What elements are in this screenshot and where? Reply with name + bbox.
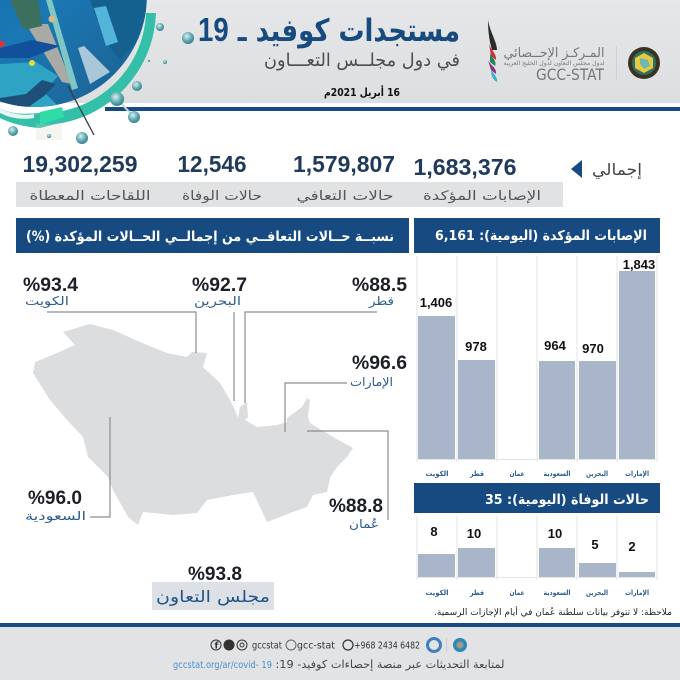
stat: recoveries <box>293 151 395 204</box>
panel heading: recovery ratio <box>16 218 409 253</box>
footer update line <box>173 658 504 671</box>
stat: recoveries: حالات التعافي <box>296 189 394 204</box>
label: Qatar <box>352 274 407 309</box>
bar chart: daily cases: البحرين <box>586 470 608 478</box>
bar chart: daily deaths: 10 <box>467 526 481 541</box>
stat: confirmed: 1,683,376 <box>414 154 516 180</box>
stat: deaths <box>178 151 262 204</box>
bar chart: daily cases: الإمارات <box>625 470 649 478</box>
bar chart: daily cases: 970 <box>582 341 604 356</box>
label: Kuwait: الكويت <box>25 294 69 309</box>
bar chart: daily deaths: قطر <box>469 589 484 597</box>
bar chart: daily deaths: 8 <box>430 524 438 539</box>
GCC-STAT logo: المـركـز الإحــصائي <box>504 46 604 61</box>
subtitle: في دول مجلــس التعـــاون <box>264 50 460 71</box>
label: Oman: عُمان <box>349 517 379 531</box>
stat: deaths: 12,546 <box>178 151 246 177</box>
bar chart: daily deaths: الإمارات <box>625 589 649 597</box>
total label with arrow: إجمالي <box>592 160 642 180</box>
bar chart: daily cases: 1,406 <box>420 295 452 310</box>
date: 16 أبريل 2021م <box>324 85 400 99</box>
bar chart: daily cases <box>417 256 657 478</box>
bar chart: daily deaths: 5 <box>591 537 599 552</box>
stat: recoveries: 1,579,807 <box>293 151 395 177</box>
label: UAE: %96.6 <box>352 352 407 374</box>
footer update line: لمتابعة التحديثات عبر منصة إحصاءات كوفيد- 19: <box>275 658 504 671</box>
stat: confirmed: الإصابات المؤكدة <box>423 189 541 204</box>
label: Qatar: قطر <box>368 294 394 309</box>
stat: vaccines <box>22 151 150 204</box>
bar chart: daily deaths: البحرين <box>586 589 608 597</box>
heading: daily deaths <box>414 483 660 513</box>
bar chart: daily deaths: عمان <box>510 589 525 597</box>
bar chart: daily deaths: السعودية <box>544 589 570 597</box>
total label with arrow <box>571 160 642 180</box>
label: Bahrain: %92.7 <box>192 274 247 296</box>
GCC map <box>33 324 353 525</box>
panel heading: recovery ratio: نسبــة حــالات التعافــي من إجمالــي الحــالات المؤكدة (%) <box>26 229 394 245</box>
footer contacts: f <box>214 642 218 652</box>
label: Kuwait <box>23 274 78 309</box>
footer contacts: +968 2434 6482 <box>354 640 420 652</box>
label: UAE: الإمارات <box>350 375 393 390</box>
header image: virus lab circle <box>0 0 194 144</box>
note: ملاحظة: لا تتوفر بيانات سلطنة عُمان في أيام الإجازات الرسمية. <box>434 606 672 618</box>
footer update line: gccstat.org/ar/covid- 19 <box>173 660 272 671</box>
footer contacts <box>211 640 420 652</box>
label: Saudi Arabia: السعودية <box>25 509 86 524</box>
GCC-STAT logo: لدول مجلس التعاون لدول الخليج العربية <box>504 60 605 67</box>
bar chart: daily deaths: 10 <box>548 526 562 541</box>
bar chart: daily cases: الكويت <box>426 470 448 478</box>
label: UAE <box>350 352 407 390</box>
heading: daily cases <box>414 218 660 253</box>
heading: daily cases: الإصابات المؤكدة (اليومية): 6,161 <box>435 228 647 244</box>
label: Saudi Arabia <box>25 487 86 524</box>
bar chart: daily cases: قطر <box>469 470 484 478</box>
stat: vaccines: 19,302,259 <box>22 151 138 177</box>
bar chart: daily deaths: 2 <box>628 539 636 554</box>
leader lines <box>47 312 388 520</box>
label: Bahrain: البحرين <box>194 294 241 309</box>
stat: deaths: حالات الوفاة <box>182 189 262 204</box>
bar chart: daily cases: 964 <box>544 338 567 353</box>
stats band <box>16 182 563 207</box>
bar chart: daily deaths: الكويت <box>426 589 448 597</box>
label: Bahrain <box>192 274 247 309</box>
label: Qatar: %88.5 <box>352 274 407 296</box>
heading: daily deaths: حالات الوفاة (اليومية): 35 <box>485 492 649 508</box>
bar chart: daily cases: عمان <box>510 470 525 478</box>
label: Oman <box>329 495 383 531</box>
footer contacts: gccstat <box>252 640 282 652</box>
label: GCC total: %93.8 <box>188 563 242 585</box>
GCC-STAT logo: GCC-STAT <box>536 65 604 84</box>
title: مستجدات كوفيد ـ 19 <box>198 11 460 49</box>
bar chart: daily deaths <box>417 516 657 597</box>
label: Kuwait: %93.4 <box>23 274 78 296</box>
GCC emblem <box>628 47 660 79</box>
bar chart: daily cases: السعودية <box>544 470 570 478</box>
footer contacts: gcc-stat <box>297 640 335 652</box>
bar chart: daily cases: 1,843 <box>623 257 655 272</box>
label: Saudi Arabia: %96.0 <box>28 487 82 509</box>
stat: confirmed <box>414 154 541 204</box>
footer band <box>0 623 680 680</box>
bar chart: daily cases: 978 <box>465 339 487 354</box>
stat: vaccines: اللقاحات المعطاة <box>30 189 150 204</box>
label: GCC total: مجلس التعاون <box>156 587 270 607</box>
label: GCC total <box>152 563 274 610</box>
GCC-STAT logo <box>488 20 617 84</box>
footer logos <box>428 638 467 652</box>
label: Oman: %88.8 <box>329 495 383 517</box>
header band <box>0 0 680 111</box>
